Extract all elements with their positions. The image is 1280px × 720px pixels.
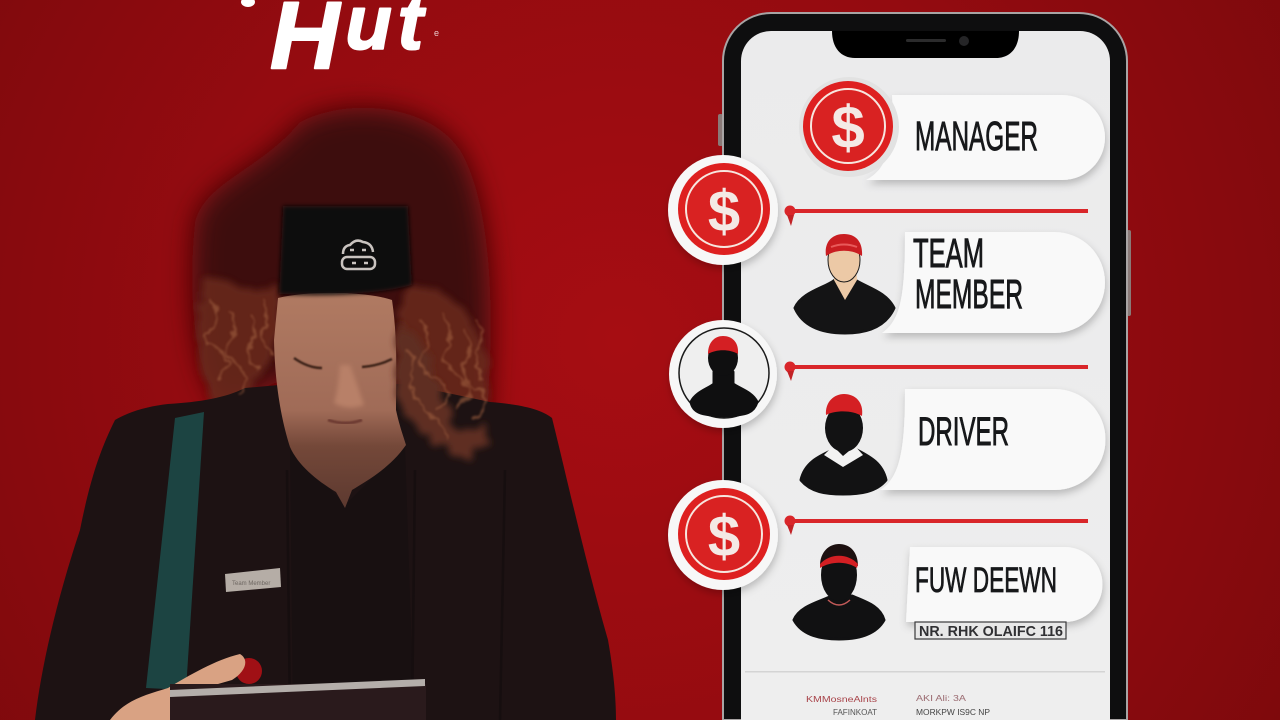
logo: e — [434, 28, 439, 38]
hand — [110, 654, 262, 720]
connector 1 — [784, 206, 1088, 226]
team member label: TEAM — [913, 230, 984, 276]
team member pill — [882, 232, 1105, 333]
role: driver — [801, 389, 1106, 494]
person — [35, 108, 616, 720]
team member figure — [795, 234, 894, 333]
phone side buttons — [718, 114, 1131, 316]
role: fuw deewn — [794, 544, 1102, 640]
phone — [718, 13, 1131, 720]
fourth figure — [794, 544, 884, 639]
manager pill — [866, 95, 1105, 180]
team member label — [913, 230, 1023, 317]
shoulder strap — [146, 412, 204, 690]
facial features — [294, 358, 392, 423]
manager coin: $ — [831, 94, 865, 161]
hair — [192, 108, 491, 456]
neck and face — [274, 293, 406, 508]
tablet — [170, 679, 426, 720]
coin callout 1 — [668, 155, 778, 265]
phone frame — [723, 13, 1127, 720]
role: team member — [795, 230, 1105, 333]
connector 3 — [784, 516, 1088, 535]
footer text: FAFINKOAT — [833, 707, 877, 717]
footer text: MORKPW IS9C NP — [916, 707, 990, 717]
logo — [241, 0, 439, 89]
manager coin — [799, 77, 899, 177]
blazer — [35, 384, 616, 720]
coin callout 1: $ — [708, 179, 740, 244]
driver pill — [880, 389, 1106, 490]
coin callout 2: $ — [708, 504, 740, 569]
silhouette callout — [669, 320, 777, 428]
connector 2 — [784, 362, 1088, 381]
boxed caption: NR. RHK OLAIFC 116 — [919, 623, 1063, 640]
cap logo — [342, 241, 375, 269]
fourth label: FUW DEEWN — [915, 561, 1057, 600]
notch — [832, 31, 1019, 58]
driver label: DRIVER — [918, 410, 1009, 454]
footer text: AKI Ali: 3A — [916, 693, 966, 703]
team member label: MEMBER — [915, 271, 1023, 317]
lapels — [287, 470, 505, 720]
curls over shoulders — [208, 300, 487, 456]
phone screen — [741, 31, 1110, 720]
footer text — [806, 693, 990, 717]
divider — [745, 671, 1105, 672]
shirt — [290, 445, 414, 720]
footer text: KMMosneAlnts — [806, 694, 877, 704]
driver figure — [801, 394, 886, 494]
cap — [279, 206, 412, 295]
manager label: MANAGER — [915, 113, 1038, 159]
role: manager — [799, 77, 1105, 180]
coin callout 2 — [668, 480, 778, 590]
name badge — [225, 568, 281, 592]
fourth pill — [906, 547, 1102, 622]
name badge: Team Member — [232, 581, 270, 587]
